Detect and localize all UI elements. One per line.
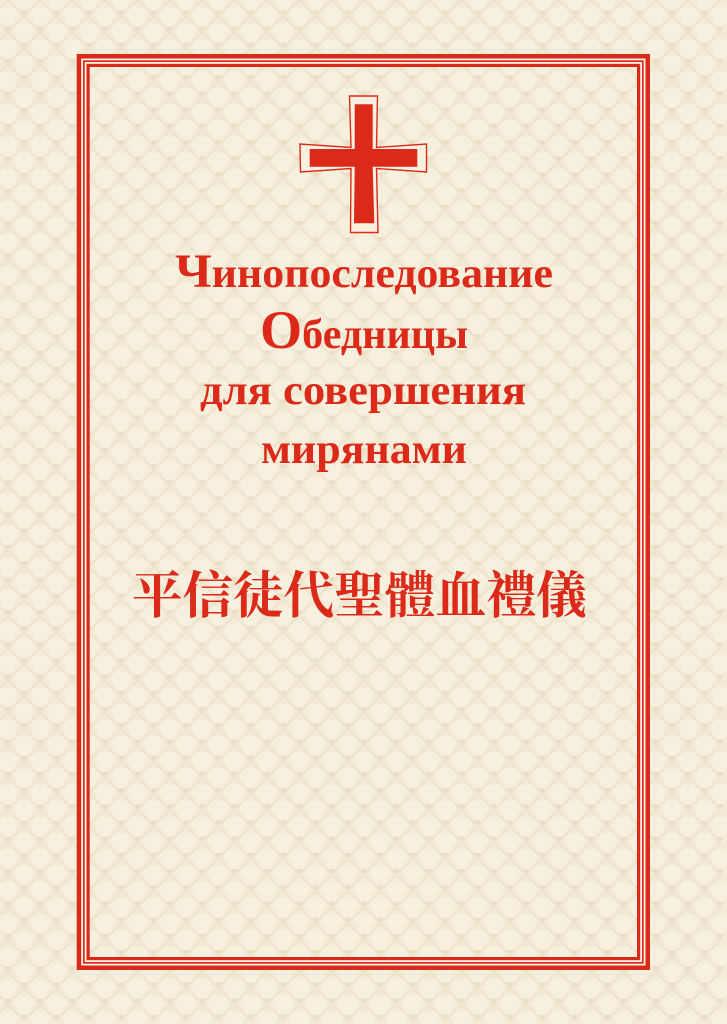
Chinese title: 平信徒代聖體血禮儀 xyxy=(132,568,587,624)
icon: red cross xyxy=(300,96,426,232)
decorative triple border frame xyxy=(79,56,648,968)
title line 1: Чинопоследование xyxy=(175,245,553,298)
title line 4: мирянами xyxy=(261,427,467,473)
title in Church Slavonic style lettering xyxy=(175,245,553,473)
title line 2: Обедницы xyxy=(260,300,468,360)
title line 3: для совершения xyxy=(200,368,526,414)
